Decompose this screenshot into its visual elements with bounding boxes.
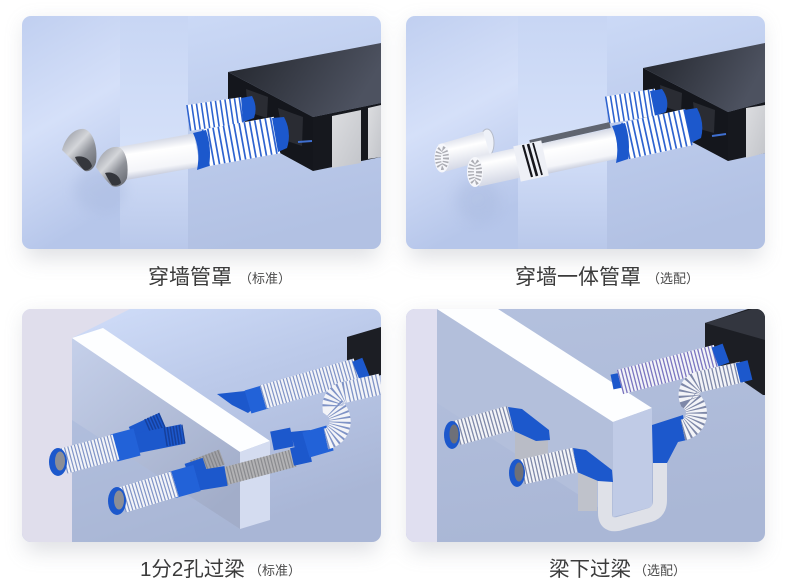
label: one-to-two-hole beam crossing: 1分2孔过梁 [140, 558, 245, 581]
blue fitting and elbow hose [652, 370, 750, 463]
label: under-beam crossing [549, 558, 686, 581]
back ribbed duct [188, 96, 256, 122]
ventilator box [643, 43, 765, 161]
ventilator box [705, 309, 765, 395]
icon: dome cap 2 [96, 147, 128, 187]
label: under-beam crossing: 梁下过梁 [549, 558, 631, 581]
label: through-wall duct cap: （标准） [239, 271, 291, 286]
icon: dome cap 1 [62, 129, 96, 171]
beam [72, 328, 270, 542]
icon: white round cap 1 [434, 129, 494, 172]
right Y-fitting and elbow hose [272, 384, 381, 457]
panel: through-wall duct cap (standard) [22, 16, 381, 249]
label: through-wall integrated duct cap: 穿墙一体管罩 [515, 266, 641, 289]
label: under-beam crossing: （选配） [634, 563, 686, 578]
left Y-duct [49, 421, 184, 476]
label: one-to-two-hole beam crossing [140, 558, 301, 581]
label: one-to-two-hole beam crossing: （标准） [249, 563, 301, 578]
front ribbed duct with blue elbow [509, 448, 613, 487]
ventilator box [228, 43, 381, 171]
panel: under-beam crossing (optional) [406, 309, 765, 542]
upper return duct [217, 367, 366, 413]
lower Y-duct with grey hose [108, 457, 294, 515]
icon: white round cap 2 [467, 157, 517, 187]
front ribbed duct [612, 108, 702, 163]
beam [437, 309, 652, 517]
integrated tube with sealing rings [517, 125, 617, 177]
panel: one-to-two-hole beam crossing (standard) [22, 309, 381, 542]
label: through-wall integrated duct cap [515, 266, 699, 289]
left ribbed duct with blue elbow [444, 407, 550, 449]
front white tube and ribbed duct [120, 117, 289, 170]
back ribbed duct [607, 89, 667, 116]
grey U-shaped flat duct [515, 432, 660, 524]
label: through-wall integrated duct cap: （选配） [647, 271, 699, 286]
ventilator box [347, 327, 381, 376]
upper ribbed duct [612, 353, 726, 382]
panel: through-wall integrated duct cap (optional) [406, 16, 765, 249]
label: through-wall duct cap [148, 266, 291, 289]
label: through-wall duct cap: 穿墙管罩 [148, 266, 232, 289]
